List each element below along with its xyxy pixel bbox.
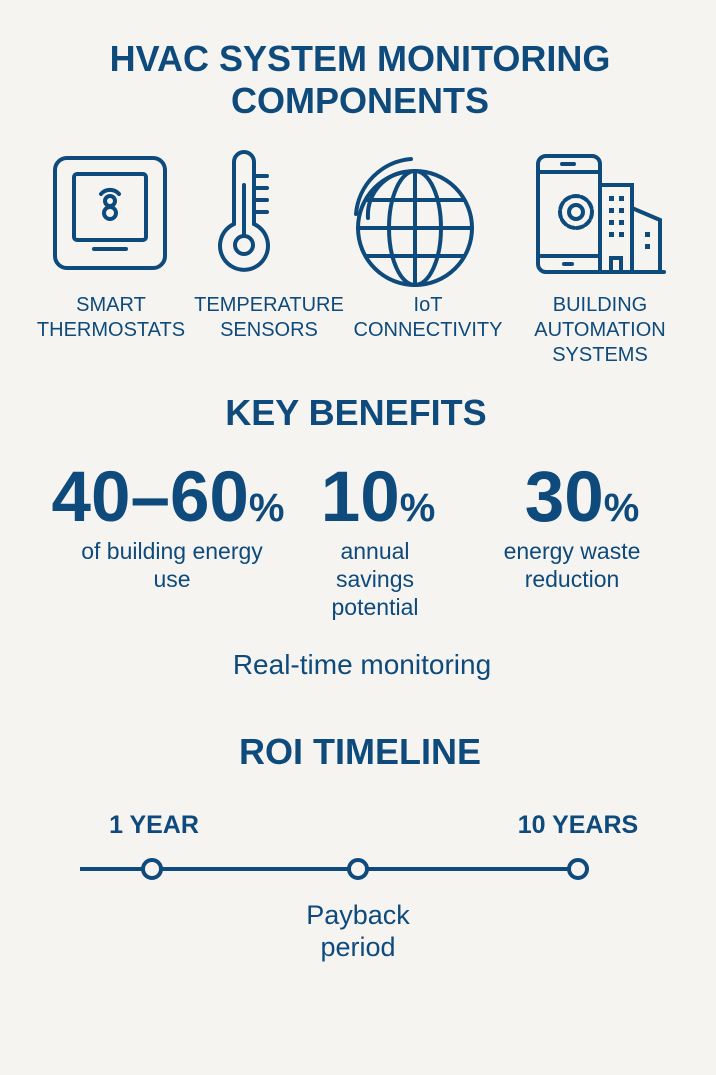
text: real-time monitoring: Real-time monitoring xyxy=(233,649,491,680)
text: payback period: Payback xyxy=(306,900,410,930)
component labels: BUILDING xyxy=(553,294,647,316)
icon: building automation xyxy=(538,156,664,272)
stat: 10%: annual xyxy=(340,538,410,564)
text: payback period: period xyxy=(320,932,396,962)
stat: 40-60% xyxy=(51,458,285,592)
heading: ROI timeline: ROI TIMELINE xyxy=(239,731,481,772)
stat: 10%: 10% xyxy=(321,458,435,537)
title: COMPONENTS xyxy=(231,80,489,121)
stat: 30%: 30% xyxy=(525,458,639,537)
heading: key benefits: KEY BENEFITS xyxy=(225,392,487,433)
stat: 40-60%: use xyxy=(153,566,191,592)
timeline labels: 10 YEARS xyxy=(518,811,638,839)
stat: 10% xyxy=(321,458,435,620)
text: payback period xyxy=(306,900,410,962)
timeline xyxy=(80,860,588,878)
component labels: TEMPERATURE xyxy=(194,294,344,316)
component labels: THERMOSTATS xyxy=(37,319,185,341)
stat: 30% xyxy=(504,458,640,592)
component labels xyxy=(37,294,666,366)
component labels: IoT xyxy=(414,294,442,316)
component labels: SMART xyxy=(76,294,146,316)
icon: thermometer xyxy=(220,152,268,270)
component labels: SENSORS xyxy=(220,319,318,341)
timeline labels: 1 YEAR xyxy=(109,811,199,839)
component labels: AUTOMATION xyxy=(534,319,666,341)
component labels: CONNECTIVITY xyxy=(354,319,502,341)
timeline labels xyxy=(109,811,638,839)
component labels: SYSTEMS xyxy=(552,344,648,366)
stat: 30%: reduction xyxy=(525,566,619,592)
title: HVAC SYSTEM MONITORING xyxy=(110,38,610,79)
icon: smart thermostat xyxy=(55,158,165,268)
icon: IoT globe xyxy=(356,159,472,285)
stat: 30%: energy waste xyxy=(504,538,640,564)
stat: 40-60%: 40–60% xyxy=(51,458,285,537)
stat: 10%: potential xyxy=(332,594,418,620)
title xyxy=(110,38,610,121)
stat: 10%: savings xyxy=(336,566,414,592)
stat: 40-60%: of building energy xyxy=(81,538,263,564)
